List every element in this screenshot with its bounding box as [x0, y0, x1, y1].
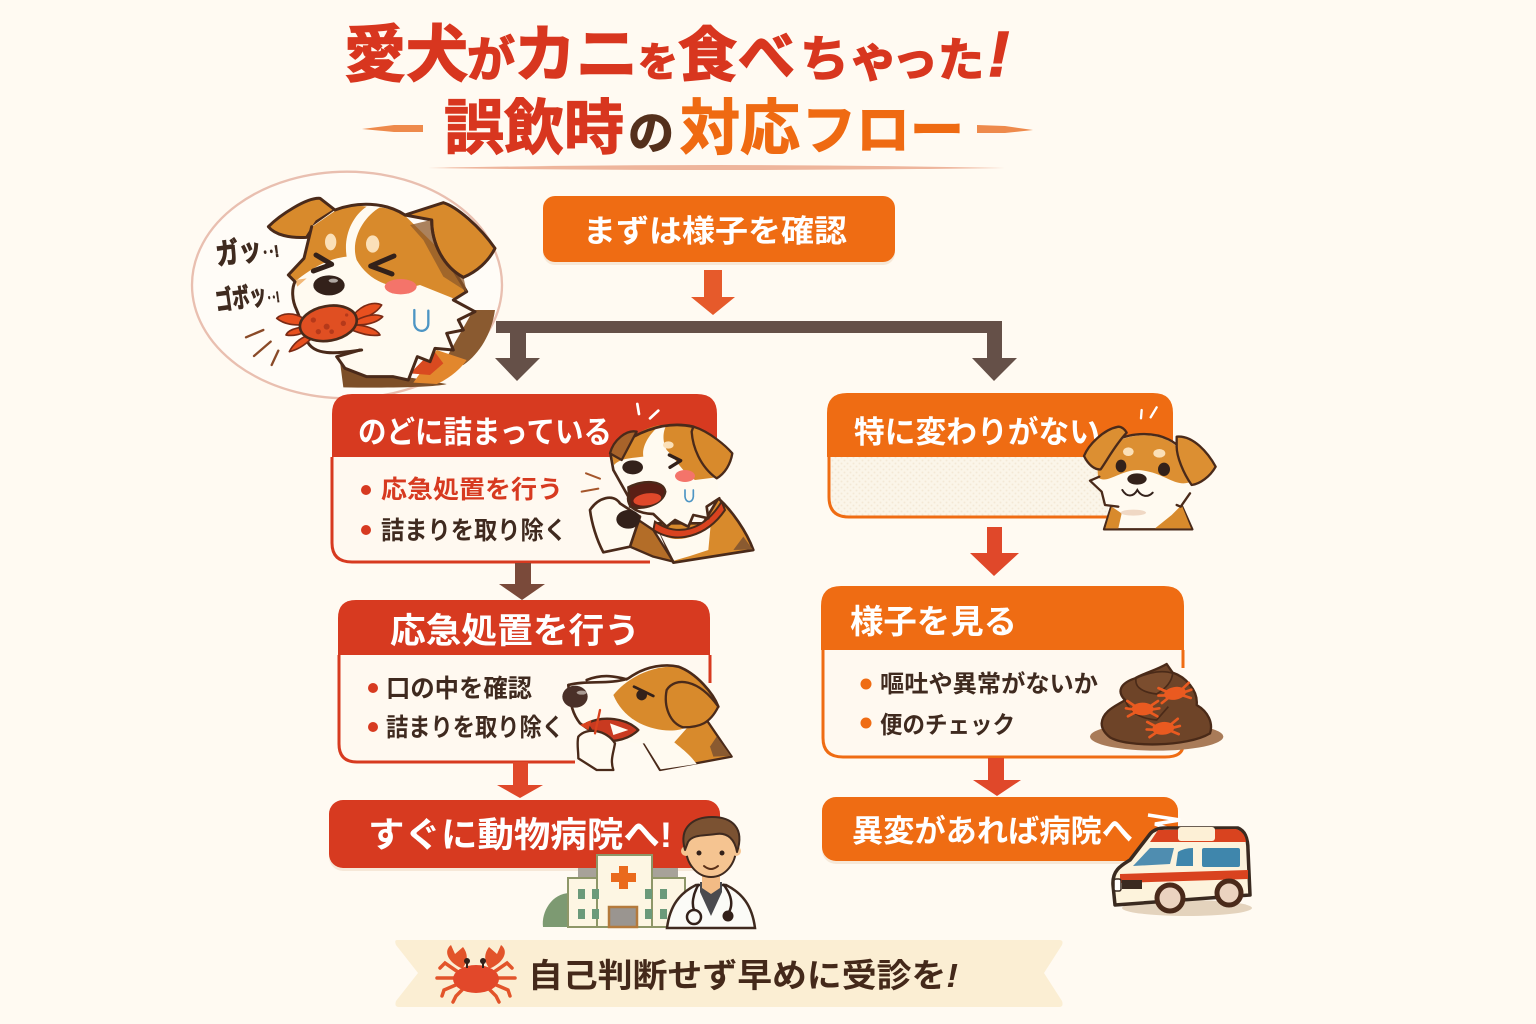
- cross: [611, 866, 636, 889]
- title line 2: 対応: [680, 95, 800, 162]
- ears: [1084, 427, 1127, 469]
- crab in mouth: [277, 301, 383, 353]
- stethoscope: [693, 884, 731, 912]
- action lines: [637, 404, 658, 418]
- motion lines: [246, 330, 278, 365]
- title line 1: !: [988, 18, 1009, 90]
- eyes: [1116, 460, 1126, 472]
- illustration: dog choking on crab: [192, 172, 502, 398]
- tweezers / crab piece: [595, 710, 600, 733]
- arrow: [973, 758, 1021, 796]
- title line 1: カニ: [514, 21, 638, 90]
- door: [609, 907, 637, 927]
- paw: [590, 498, 640, 552]
- box: check first: [543, 196, 895, 265]
- illustration: doctor: [667, 817, 755, 928]
- dog right ear: [405, 203, 495, 277]
- heading: 特に変わりがない: [854, 415, 1100, 450]
- heading: 様子を見る: [850, 603, 1017, 640]
- body: [1104, 502, 1192, 529]
- heading: まずは様子を確認: [583, 214, 847, 249]
- dog body: [339, 357, 447, 388]
- heading: 応急処置を行う: [390, 612, 640, 651]
- title line 1: が: [467, 34, 515, 87]
- title line 2: 誤飲時: [444, 95, 624, 162]
- head: [1090, 434, 1190, 522]
- red roof: [1150, 829, 1246, 842]
- bullet 2: 詰まりを取り除く: [386, 714, 564, 742]
- face: [663, 441, 674, 449]
- sound effect text: ガッ‥!: [214, 231, 280, 272]
- stripe: [1120, 870, 1248, 883]
- panel: no change: [827, 393, 1173, 517]
- mouth: [587, 719, 638, 741]
- panel: watch: [821, 586, 1184, 757]
- ribbon banner: [395, 940, 1063, 1007]
- bullet 2: 詰まりを取り除く: [381, 517, 567, 545]
- panel: first aid: [338, 600, 710, 762]
- box: go to hospital if abnormal: [822, 797, 1178, 864]
- crab shell 1: [1126, 701, 1159, 716]
- brows: [1123, 447, 1134, 456]
- arrow: [499, 563, 545, 600]
- title line 2: の: [628, 107, 674, 159]
- dog nose: [313, 275, 345, 295]
- collar: [653, 502, 725, 537]
- arrow: [497, 762, 543, 798]
- bullet 2: 便のチェック: [880, 712, 1015, 739]
- title line 1: 愛犬: [344, 21, 468, 90]
- nose: [562, 686, 588, 708]
- title line 1: ちゃ: [800, 33, 898, 87]
- head: [611, 425, 719, 527]
- bullet 1: 応急処置を行う: [381, 476, 563, 504]
- illustration: hospital: [543, 855, 685, 927]
- nose and mouth: [1127, 473, 1147, 485]
- crab shell 3: [1146, 719, 1181, 737]
- title line 1: を: [638, 41, 678, 85]
- open mouth: [628, 482, 665, 508]
- sweat drop: [414, 310, 428, 331]
- headlight: [1114, 879, 1121, 891]
- icon: crab: [437, 945, 515, 1002]
- bullet 1: 口の中を確認: [386, 675, 532, 703]
- sweat drop: [685, 490, 693, 502]
- arrow: [970, 527, 1019, 576]
- title line 1: べ: [738, 25, 795, 89]
- vehicle body: [1113, 828, 1250, 905]
- title line 1: 食: [678, 23, 737, 89]
- box: go to vet now: [329, 800, 720, 871]
- illustration: dog mouth being checked: [562, 665, 732, 770]
- bullet 1: 嘔吐や異常がないか: [880, 670, 1098, 698]
- ear: [666, 682, 718, 727]
- head: [568, 665, 718, 743]
- illustration: coughing dog: [582, 404, 753, 563]
- action lines: [1141, 407, 1157, 418]
- coat: [667, 885, 755, 928]
- windows: [1133, 848, 1174, 866]
- hand: [578, 731, 615, 770]
- illustration: ambulance: [1113, 815, 1252, 916]
- right ear: [692, 427, 732, 478]
- eye: [634, 687, 653, 696]
- hair: [683, 817, 739, 852]
- dog head: [288, 204, 475, 380]
- illustration: calm dog: [1084, 407, 1216, 529]
- title: [344, 18, 1033, 170]
- dog blush: [385, 279, 417, 294]
- crab shell 2: [1157, 683, 1193, 703]
- title line 1: った: [892, 34, 984, 86]
- wheels: [1157, 885, 1183, 911]
- dog left ear: [268, 198, 335, 238]
- shirt and neck: [700, 882, 722, 916]
- title line 2: フロー: [802, 101, 964, 161]
- face: [686, 819, 736, 877]
- panel: throat blocked: [332, 394, 717, 562]
- windows: [578, 889, 667, 919]
- body: [657, 498, 753, 563]
- arrow: [691, 270, 735, 315]
- heading: すぐに動物病院へ!: [368, 816, 672, 855]
- illustration: stool with crab shells: [1090, 664, 1223, 751]
- dog eyes: [313, 255, 394, 274]
- heading: 異変があれば病院へ: [852, 814, 1133, 849]
- speech circle: [192, 172, 502, 398]
- callout text: 自己判断せず早めに受診を !: [528, 957, 958, 994]
- neck: [640, 720, 732, 770]
- heading: のどに詰まっている: [358, 415, 612, 450]
- branch connector: [495, 321, 1017, 381]
- sound effect text 2: ゴボッ‥!: [213, 278, 281, 317]
